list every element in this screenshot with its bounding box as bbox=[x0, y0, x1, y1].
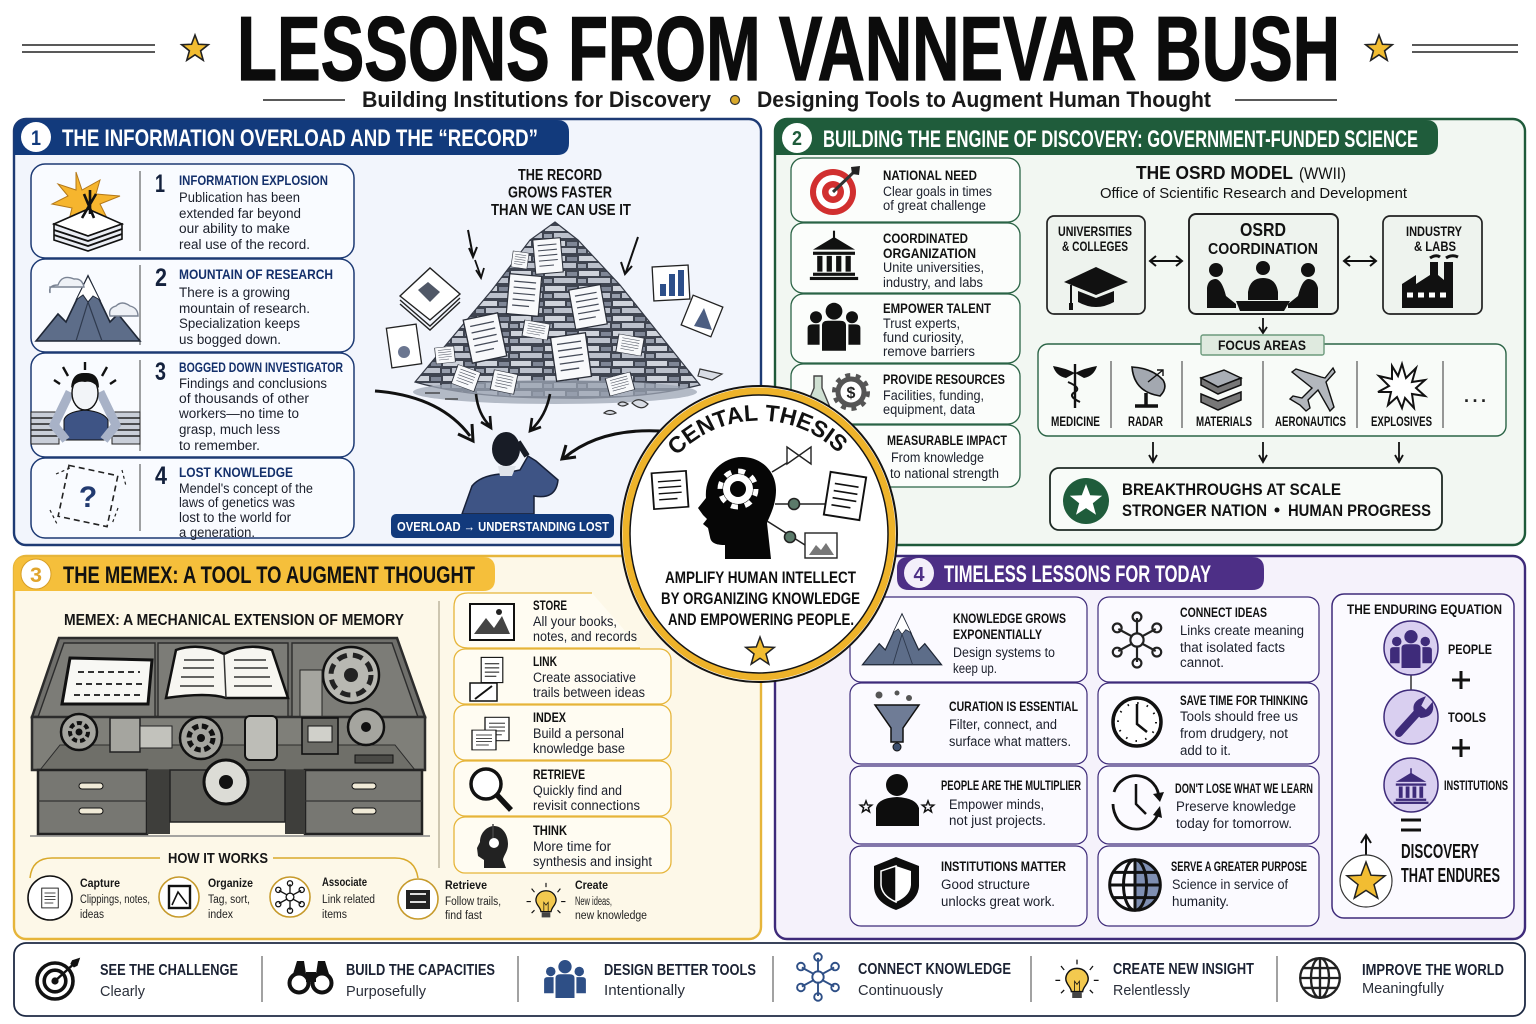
card: think bbox=[454, 817, 671, 873]
callout: breakthroughs at scale: STRONGER NATION bbox=[1122, 501, 1267, 520]
text: mountain of research: There is a growing bbox=[179, 285, 290, 300]
step: associate bbox=[270, 875, 375, 921]
footer: see the challenge: SEE THE CHALLENGE bbox=[100, 962, 238, 979]
text: coordinated organization: Unite universities, bbox=[883, 260, 984, 275]
card: bogged down investigator bbox=[31, 353, 354, 457]
text: empower talent bbox=[883, 301, 992, 359]
panel: enduring equation: INSTITUTIONS bbox=[1444, 778, 1508, 793]
box: universities bbox=[1047, 216, 1145, 314]
text: information explosion: real use of the record. bbox=[179, 237, 310, 252]
card: mountain of research bbox=[31, 259, 354, 352]
subtitle: Building Institutions for Discovery bbox=[362, 87, 712, 112]
text: national need: of great challenge bbox=[883, 198, 986, 213]
icon: gold star bbox=[746, 637, 774, 664]
icon: equals bbox=[1401, 820, 1421, 830]
text: index: knowledge base bbox=[533, 741, 625, 756]
panel: memex bbox=[14, 556, 761, 939]
icon: plus bbox=[1452, 671, 1470, 689]
text: connect ideas: CONNECT IDEAS bbox=[1180, 605, 1267, 620]
text: thesis statement: BY ORGANIZING KNOWLEDGE bbox=[661, 589, 860, 608]
text: provide resources: equipment, data bbox=[883, 402, 975, 417]
text: lost knowledge: laws of genetics was bbox=[179, 495, 295, 510]
text: institutions matter: INSTITUTIONS MATTER bbox=[941, 859, 1066, 874]
icon: factory bbox=[1402, 256, 1458, 308]
text: thesis statement: AMPLIFY HUMAN INTELLECT bbox=[665, 568, 856, 587]
text: serve a greater purpose: humanity. bbox=[1172, 894, 1229, 909]
heading: memex mechanical extension: MEMEX: A MECHANICAL EXTENSION OF MEMORY bbox=[64, 612, 405, 629]
footer: see the challenge: Clearly bbox=[100, 984, 146, 1000]
icon: institution bbox=[1384, 758, 1438, 812]
panel 3 heading: THE MEMEX: A TOOL TO AUGMENT THOUGHT bbox=[63, 562, 475, 589]
focus area labels: MATERIALS bbox=[1196, 414, 1252, 429]
text: provide resources: PROVIDE RESOURCES bbox=[883, 372, 1005, 387]
footer: see the challenge bbox=[37, 958, 238, 1000]
text: don't lose what we learn: DON'T LOSE WHAT WE LEARN bbox=[1175, 781, 1313, 796]
text: lost knowledge: a generation. bbox=[179, 525, 255, 540]
text: national need: Clear goals in times bbox=[883, 184, 992, 199]
icon: magnifying glass bbox=[471, 769, 511, 810]
card: provide resources bbox=[791, 364, 1020, 424]
text: knowledge grows: keep up. bbox=[953, 661, 997, 676]
text: retrieve bbox=[533, 767, 640, 813]
icon: funnel bbox=[875, 690, 919, 751]
text: knowledge grows: Design systems to bbox=[953, 645, 1055, 660]
footer: design better tools: Intentionally bbox=[604, 983, 686, 999]
text: bogged down investigator: workers—no time to bbox=[178, 406, 299, 421]
text: empower talent: fund curiosity, bbox=[883, 330, 964, 345]
focus area labels: ... bbox=[1464, 386, 1490, 406]
arrow: pile to head left bbox=[476, 394, 491, 428]
icon: discovery star bbox=[1340, 855, 1392, 907]
footer: create new insight bbox=[1055, 960, 1254, 999]
step: capture: Capture bbox=[80, 876, 120, 890]
text: measurable impact: MEASURABLE IMPACT bbox=[887, 433, 1008, 448]
icon: right star bbox=[1366, 35, 1392, 60]
card: don't lose what we learn bbox=[1098, 766, 1319, 844]
text: don't lose what we learn bbox=[1175, 781, 1313, 831]
icon: flask and gear: $ bbox=[847, 385, 856, 402]
text: empower talent: Trust experts, bbox=[883, 316, 960, 331]
footer: connect knowledge bbox=[797, 953, 1011, 1001]
text: save time: from drudgery, not bbox=[1180, 726, 1288, 741]
text: institutions matter bbox=[941, 859, 1066, 909]
panel: engine of discovery bbox=[775, 119, 1525, 545]
step: capture bbox=[28, 876, 150, 921]
card: information explosion bbox=[31, 164, 354, 258]
text: don't lose what we learn: today for tomorrow. bbox=[1176, 816, 1292, 831]
text: mountain of research bbox=[155, 264, 333, 347]
arrow: falling into pile, right bbox=[621, 237, 638, 274]
text: lost knowledge: Mendel's concept of the bbox=[179, 481, 313, 496]
section: how it works: HOW IT WORKS bbox=[168, 850, 268, 867]
panel 4 heading: TIMELESS LESSONS FOR TODAY bbox=[944, 561, 1211, 588]
text: thesis statement bbox=[661, 568, 860, 629]
callout: breakthroughs at scale bbox=[1050, 468, 1442, 530]
panel 2 heading: 2 bbox=[792, 128, 802, 150]
card: index bbox=[454, 705, 671, 760]
text: discovery that endures bbox=[1401, 841, 1500, 887]
text: coordinated organization bbox=[883, 231, 984, 290]
text: think: synthesis and insight bbox=[533, 854, 652, 869]
text: link: LINK bbox=[533, 654, 557, 669]
icon: head with gear bbox=[698, 457, 776, 559]
icon: mountain bbox=[36, 276, 140, 341]
badge: overload understanding lost bbox=[391, 514, 614, 538]
panel: information overload bbox=[14, 119, 761, 545]
step: associate: Associate bbox=[322, 875, 367, 889]
text: think bbox=[533, 823, 652, 869]
arrow: up bbox=[1361, 835, 1371, 855]
icon: picture bbox=[470, 604, 514, 640]
focus area labels: EXPLOSIVES bbox=[1371, 414, 1432, 429]
footer: build the capacities bbox=[290, 961, 495, 1000]
icon: airplane bbox=[1290, 368, 1335, 411]
text: measurable impact: From knowledge bbox=[891, 450, 984, 465]
text: index: Build a personal bbox=[533, 726, 624, 741]
text: mountain of research: MOUNTAIN OF RESEARCH bbox=[179, 266, 333, 282]
footer: build the capacities: Purposefully bbox=[346, 984, 427, 1000]
text: discovery that endures: DISCOVERY bbox=[1401, 841, 1479, 863]
text: empower talent: remove barriers bbox=[883, 344, 975, 359]
card: curation bbox=[850, 683, 1087, 764]
icon: flask and gear bbox=[804, 375, 868, 412]
text: information explosion: 1 bbox=[155, 170, 165, 198]
text: retrieve: RETRIEVE bbox=[533, 767, 585, 782]
step: associate: Link related bbox=[322, 894, 375, 906]
text: curation: Filter, connect, and bbox=[949, 717, 1057, 732]
box: universities: UNIVERSITIES bbox=[1058, 224, 1132, 239]
icon: stressed person bbox=[31, 362, 140, 444]
text: lost knowledge: LOST KNOWLEDGE bbox=[179, 464, 293, 480]
text: bogged down investigator: grasp, much less bbox=[179, 422, 280, 437]
footer: improve the world: IMPROVE THE WORLD bbox=[1362, 962, 1504, 979]
card: lost knowledge bbox=[31, 458, 354, 540]
text: connect ideas bbox=[1180, 605, 1304, 670]
box: OSRD coordination: COORDINATION bbox=[1208, 241, 1318, 258]
text: bogged down investigator: to remember. bbox=[179, 438, 260, 453]
text: store: All your books, bbox=[533, 614, 617, 629]
text: institutions matter: unlocks great work. bbox=[941, 894, 1055, 909]
icon: team bbox=[808, 303, 860, 351]
card: coordinated organization bbox=[791, 223, 1020, 293]
panel: timeless lessons bbox=[775, 556, 1525, 939]
icon: thinking head bbox=[477, 824, 508, 868]
arrow: falling into pile, lower left bbox=[475, 260, 484, 278]
text: link: trails between ideas bbox=[533, 685, 645, 700]
icon: institution bbox=[810, 231, 858, 280]
step: create: new knowledge bbox=[575, 910, 647, 922]
text: measurable impact bbox=[887, 433, 1008, 481]
text: coordinated organization: ORGANIZATION bbox=[883, 246, 976, 261]
arrow: universities to OSRD bbox=[1150, 256, 1182, 266]
icon: wrench bbox=[1384, 690, 1438, 744]
step: create bbox=[527, 878, 647, 922]
icon: globe bbox=[1110, 860, 1160, 910]
text: information explosion: INFORMATION EXPLOSION bbox=[179, 172, 328, 188]
text: don't lose what we learn: Preserve knowledge bbox=[1176, 799, 1296, 814]
subtitle: Designing Tools to Augment Human Thought bbox=[757, 87, 1212, 112]
text: empower talent: EMPOWER TALENT bbox=[883, 301, 992, 316]
text: bogged down investigator: 3 bbox=[155, 358, 166, 386]
focus area labels: AERONAUTICS bbox=[1275, 414, 1346, 429]
text: think: THINK bbox=[533, 823, 567, 838]
step: associate: items bbox=[322, 909, 347, 921]
text: provide resources: Facilities, funding, bbox=[883, 388, 984, 403]
illustration: mountain of documents bbox=[386, 222, 723, 414]
heading: the record grows faster: THE RECORD bbox=[518, 167, 602, 184]
text: store bbox=[533, 598, 637, 644]
callout: breakthroughs at scale: BREAKTHROUGHS AT SCALE bbox=[1122, 480, 1341, 499]
arrow: right curve bbox=[562, 431, 660, 459]
icon: missing document: ? bbox=[79, 481, 97, 514]
panel: focus areas bbox=[1038, 335, 1506, 436]
central thesis badge bbox=[620, 385, 898, 683]
step: retrieve: Retrieve bbox=[445, 878, 487, 892]
focus area labels: MEDICINE bbox=[1051, 414, 1100, 429]
text: link: Create associative bbox=[533, 670, 636, 685]
card: retrieve bbox=[454, 761, 671, 816]
text: bogged down investigator: of thousands of other bbox=[179, 391, 310, 406]
footer: improve the world bbox=[1300, 958, 1504, 998]
text: people multiplier: Empower minds, bbox=[949, 797, 1044, 812]
card: link bbox=[454, 649, 671, 704]
text: bogged down investigator bbox=[155, 358, 343, 453]
text: mountain of research: mountain of research. bbox=[179, 301, 310, 316]
box: industry and labs: INDUSTRY bbox=[1406, 224, 1462, 239]
text: retrieve: revisit connections bbox=[533, 798, 640, 813]
box: OSRD coordination: OSRD bbox=[1240, 220, 1286, 240]
text: mountain of research: Specialization keeps bbox=[179, 316, 300, 331]
panel 3 heading: 3 bbox=[30, 564, 42, 587]
text: store: STORE bbox=[533, 598, 567, 613]
footer: build the capacities: BUILD THE CAPACITIES bbox=[346, 962, 495, 979]
arrow: falling into pile, upper left bbox=[468, 230, 477, 257]
footer: design better tools: DESIGN BETTER TOOLS bbox=[604, 962, 756, 979]
text: provide resources bbox=[883, 372, 1005, 417]
footer: improve the world: Meaningfully bbox=[1362, 981, 1445, 997]
icon: meeting table bbox=[1207, 261, 1318, 311]
icon: explosion bbox=[1378, 364, 1425, 408]
heading: OSRD model: THE OSRD MODEL bbox=[1136, 163, 1293, 183]
icon: left document bbox=[652, 471, 688, 509]
text: information explosion: Publication has been bbox=[179, 190, 300, 205]
text: measurable impact: to national strength bbox=[890, 466, 999, 481]
step: organize: Tag, sort, bbox=[208, 894, 250, 906]
text: save time: SAVE TIME FOR THINKING bbox=[1180, 693, 1308, 708]
card: people multiplier bbox=[850, 766, 1087, 844]
icon: clock bbox=[1113, 698, 1161, 746]
subtitle bbox=[362, 87, 1212, 112]
callout: breakthroughs at scale: HUMAN PROGRESS bbox=[1288, 501, 1431, 520]
icon: radar dish bbox=[1132, 367, 1165, 406]
panel: enduring equation bbox=[1332, 594, 1514, 918]
panel 1 heading bbox=[14, 120, 569, 155]
text: index bbox=[533, 710, 625, 756]
text: people multiplier bbox=[941, 778, 1081, 828]
text: lost knowledge: lost to the world for bbox=[179, 510, 291, 525]
footer: create new insight: Relentlessly bbox=[1113, 983, 1191, 999]
text: mountain of research: us bogged down. bbox=[179, 332, 281, 347]
text: lost knowledge bbox=[155, 462, 313, 540]
text: people multiplier: not just projects. bbox=[949, 813, 1046, 828]
panel: enduring equation: THE ENDURING EQUATION bbox=[1347, 602, 1502, 617]
illustration: overwhelmed person bbox=[462, 432, 558, 514]
text: national need: NATIONAL NEED bbox=[883, 168, 977, 183]
section: how it works bbox=[28, 850, 647, 922]
heading: OSRD model: (WWII) bbox=[1299, 164, 1346, 183]
heading: cental thesis: CENTAL THESIS bbox=[669, 404, 847, 452]
text: bogged down investigator: BOGGED DOWN INVESTIGATOR bbox=[179, 359, 343, 375]
text: knowledge grows bbox=[953, 611, 1066, 676]
text: information explosion: extended far beyond bbox=[179, 206, 301, 221]
text: retrieve: Quickly find and bbox=[533, 783, 622, 798]
text: curation: surface what matters. bbox=[949, 734, 1071, 749]
step: capture: Clippings, notes, bbox=[80, 894, 150, 906]
step: organize: Organize bbox=[208, 876, 253, 890]
icon: caduceus bbox=[1053, 364, 1097, 408]
text: serve a greater purpose bbox=[1171, 859, 1307, 909]
card: institutions matter bbox=[850, 846, 1087, 926]
icon: bowtie sketch bbox=[787, 447, 811, 464]
text: knowledge grows: KNOWLEDGE GROWS bbox=[953, 611, 1066, 626]
text: information explosion bbox=[155, 170, 328, 252]
text: mountain of research: 2 bbox=[155, 264, 167, 292]
text: connect ideas: Links create meaning bbox=[1180, 623, 1304, 638]
panel: focus areas: FOCUS AREAS bbox=[1218, 338, 1306, 353]
text: store: notes, and records bbox=[533, 629, 637, 644]
icon: plus bbox=[1452, 739, 1470, 757]
text: serve a greater purpose: SERVE A GREATER PURPOSE bbox=[1171, 859, 1307, 874]
panel 2 heading bbox=[775, 120, 1438, 155]
icon: circular clock bbox=[1113, 776, 1164, 829]
panel: enduring equation: TOOLS bbox=[1448, 710, 1486, 725]
icon: left star bbox=[182, 35, 208, 60]
heading: the record grows faster: GROWS FASTER bbox=[508, 184, 612, 202]
panel: enduring equation: PEOPLE bbox=[1448, 642, 1492, 657]
footer: connect knowledge: Continuously bbox=[858, 983, 944, 999]
card: measurable impact bbox=[791, 425, 1020, 487]
panel 4 heading: 4 bbox=[914, 564, 925, 586]
card: empower talent bbox=[791, 294, 1020, 363]
step: organize bbox=[159, 876, 253, 921]
arrows: focus areas to breakthroughs bbox=[1149, 442, 1403, 462]
text: institutions matter: Good structure bbox=[941, 877, 1030, 892]
step: organize: index bbox=[208, 909, 233, 921]
step: retrieve bbox=[398, 878, 501, 922]
icon: target bbox=[810, 166, 860, 215]
icon: clouds bbox=[50, 277, 138, 316]
heading: OSRD model bbox=[1100, 163, 1408, 202]
footer: connect knowledge: CONNECT KNOWLEDGE bbox=[858, 961, 1011, 978]
step: retrieve: find fast bbox=[445, 910, 483, 922]
box: OSRD coordination bbox=[1189, 214, 1338, 314]
step: retrieve: Follow trails, bbox=[445, 896, 501, 908]
icon: person with stars bbox=[860, 774, 934, 826]
footer bar bbox=[14, 943, 1525, 1016]
heading: the record grows faster bbox=[491, 167, 631, 219]
box: industry and labs bbox=[1383, 216, 1482, 314]
card: knowledge grows bbox=[850, 597, 1087, 682]
card: serve a greater purpose bbox=[1098, 846, 1319, 926]
text: coordinated organization: industry, and labs bbox=[883, 275, 983, 290]
heading: OSRD model: Office of Scientific Research and Development bbox=[1100, 185, 1408, 202]
arrow: OSRD to industry bbox=[1344, 256, 1376, 266]
text: knowledge grows: EXPONENTIALLY bbox=[953, 627, 1042, 642]
step: create: Create bbox=[575, 878, 608, 892]
icon: people bbox=[1384, 621, 1438, 675]
text: think: More time for bbox=[533, 839, 611, 854]
card: save time bbox=[1098, 683, 1319, 764]
icon: materials bbox=[1201, 370, 1241, 410]
panel 4 heading bbox=[897, 557, 1264, 590]
text: save time: Tools should free us bbox=[1180, 709, 1298, 724]
text: save time: add to it. bbox=[1180, 743, 1231, 758]
card: national need bbox=[791, 158, 1020, 222]
icon: image bbox=[805, 533, 837, 558]
text: coordinated organization: COORDINATED bbox=[883, 231, 968, 246]
icon: index files bbox=[472, 717, 509, 750]
icon: missing document bbox=[50, 465, 126, 527]
text: bogged down investigator: Findings and conclusions bbox=[179, 376, 327, 391]
text: thesis statement: AND EMPOWERING PEOPLE. bbox=[668, 610, 854, 629]
arrow: big left curve bbox=[375, 391, 473, 441]
text: link bbox=[533, 654, 645, 700]
text: connect ideas: cannot. bbox=[1180, 655, 1224, 670]
icon: shield bbox=[874, 857, 919, 910]
card: connect ideas bbox=[1098, 597, 1319, 682]
card: store bbox=[454, 593, 640, 648]
focus area labels bbox=[1051, 386, 1490, 429]
footer: design better tools bbox=[544, 960, 756, 999]
text: information explosion: our ability to make bbox=[179, 221, 290, 236]
text: people multiplier: PEOPLE ARE THE MULTIPLIER bbox=[941, 778, 1081, 793]
arrow: OSRD to focus areas bbox=[1259, 318, 1267, 333]
network links bbox=[767, 461, 825, 545]
icon: mountain bbox=[862, 614, 942, 665]
text: index: INDEX bbox=[533, 710, 566, 725]
icon: linked documents bbox=[470, 657, 503, 701]
box: industry and labs: & LABS bbox=[1414, 239, 1456, 254]
icon: network bbox=[1113, 612, 1161, 668]
step: create: New ideas, bbox=[575, 896, 612, 908]
panel 1 heading: THE INFORMATION OVERLOAD AND THE “RECORD” bbox=[62, 125, 538, 152]
arrow: pile to head right bbox=[530, 394, 550, 431]
box: universities: & COLLEGES bbox=[1062, 239, 1128, 254]
text: save time bbox=[1180, 693, 1308, 758]
text: lost knowledge: 4 bbox=[155, 462, 167, 490]
icon: graduation cap bbox=[1064, 267, 1128, 310]
text: curation bbox=[949, 699, 1078, 749]
text: connect ideas: that isolated facts bbox=[1180, 640, 1285, 655]
icon: exploding books bbox=[52, 172, 122, 251]
icon: right document bbox=[824, 472, 866, 520]
illustration: memex desk bbox=[30, 638, 430, 836]
focus area labels: RADAR bbox=[1128, 414, 1163, 429]
badge: overload understanding lost: OVERLOAD → UNDERSTANDING LOST bbox=[397, 519, 609, 534]
text: serve a greater purpose: Science in service of bbox=[1172, 877, 1288, 892]
heading: the record grows faster: THAN WE CAN USE IT bbox=[491, 202, 631, 219]
panel 1 heading: 1 bbox=[31, 127, 41, 150]
footer: create new insight: CREATE NEW INSIGHT bbox=[1113, 961, 1254, 978]
text: curation: CURATION IS ESSENTIAL bbox=[949, 699, 1078, 714]
panel 3 heading bbox=[14, 557, 495, 591]
text: national need bbox=[883, 168, 992, 213]
step: capture: ideas bbox=[80, 909, 104, 921]
